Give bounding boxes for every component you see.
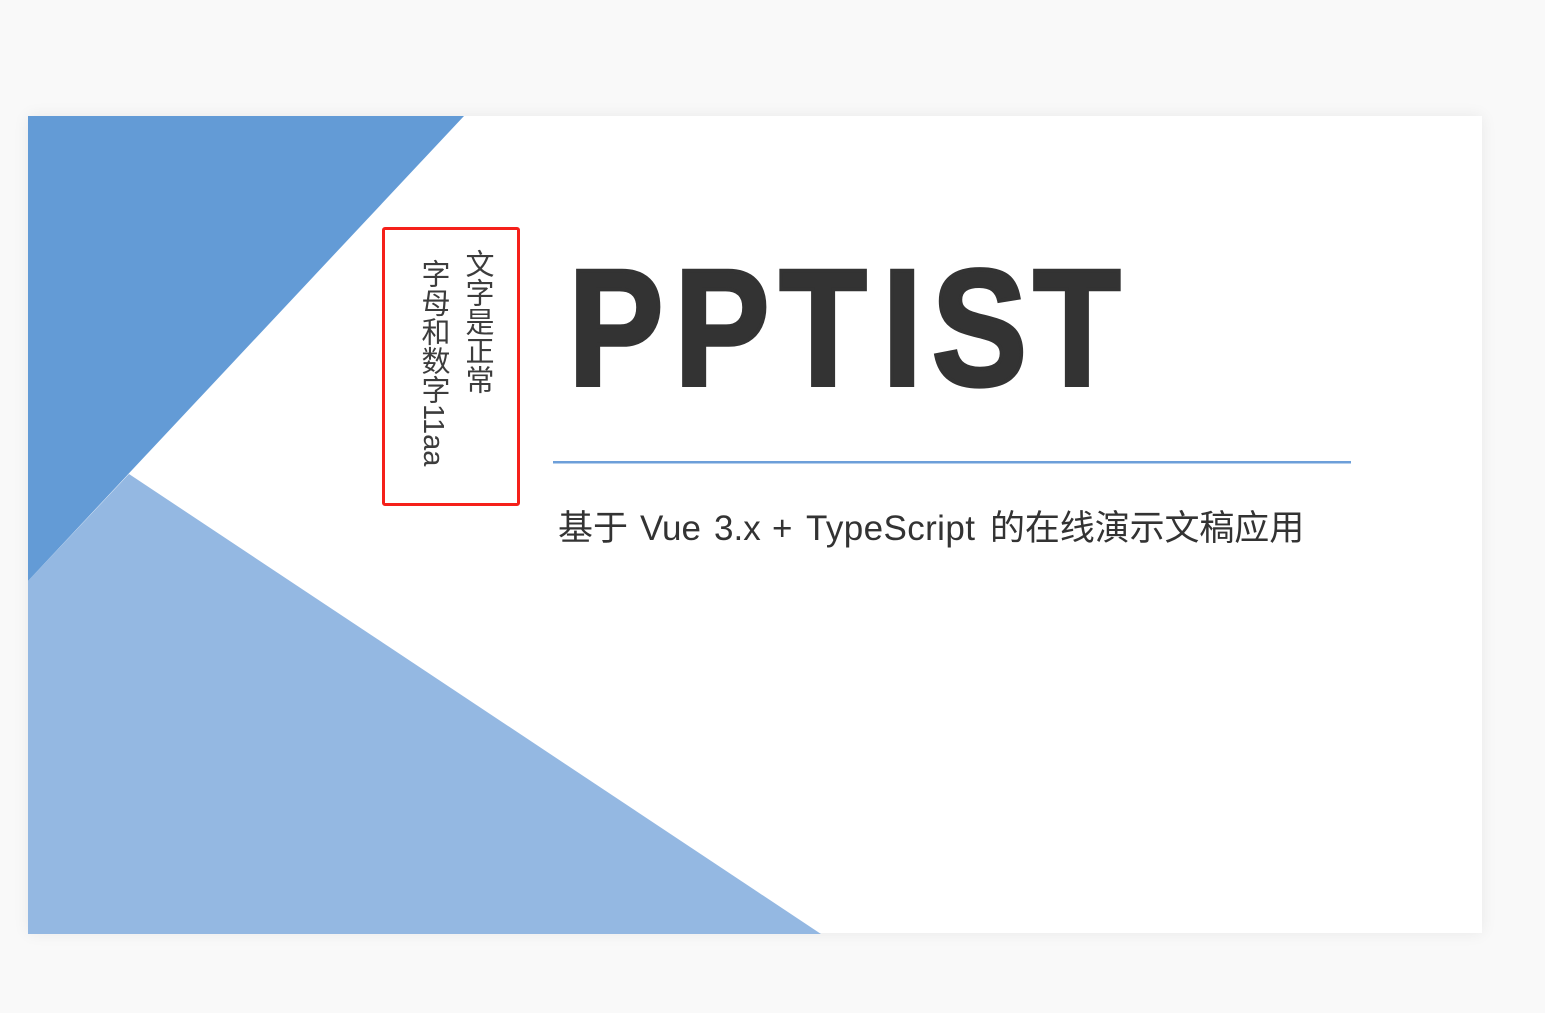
subtitle: TypeScript [806, 509, 975, 548]
subtitle: + [772, 509, 792, 548]
red vertical text box [382, 227, 520, 506]
vertical text: first column: 文字是正常 [461, 249, 493, 394]
shape: dark blue triangle [28, 116, 464, 581]
divider line [553, 461, 1351, 464]
subtitle: 基于 [558, 509, 628, 548]
subtitle: Vue [640, 509, 701, 548]
subtitle: 的在线演示文稿应用 [990, 509, 1304, 548]
subtitle: 3.x [714, 509, 761, 548]
title: PPTIST [568, 235, 1120, 420]
panel: slide [28, 116, 1482, 933]
vertical text: second column: 字母和数字11aa [417, 259, 449, 466]
shape: light blue triangle [28, 474, 821, 934]
